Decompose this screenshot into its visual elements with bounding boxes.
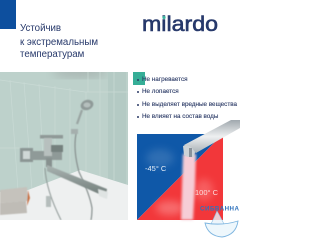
steam — [146, 149, 213, 215]
spout — [183, 120, 240, 157]
feature list: Не влияет на состав воды — [142, 112, 218, 120]
label hot: 100° C — [195, 188, 219, 197]
label cold: -45° C — [145, 164, 167, 173]
feature list — [137, 76, 238, 120]
temperature chart with spout — [137, 120, 240, 238]
feature list: Не нагревается — [142, 76, 188, 82]
water stream — [181, 154, 196, 220]
hot triangle — [137, 134, 223, 220]
cold triangle — [137, 134, 223, 220]
photo: bath faucet — [0, 72, 128, 220]
heading: температурам — [20, 49, 84, 60]
heading: Устойчив — [20, 23, 61, 34]
faucet — [20, 135, 108, 220]
heading — [20, 23, 98, 60]
feature list: Не выделяет вредные вещества — [142, 100, 237, 108]
teal accent square — [133, 72, 145, 85]
heading: к экстремальным — [20, 37, 98, 48]
bathtub — [0, 170, 128, 220]
logo: milardo: milardo — [142, 13, 218, 36]
blue corner block — [0, 0, 16, 29]
watermark: СИБВАННА — [200, 206, 240, 212]
feature list: Не лопается — [142, 88, 179, 95]
shower head and hose — [71, 98, 95, 220]
towels — [0, 187, 30, 215]
